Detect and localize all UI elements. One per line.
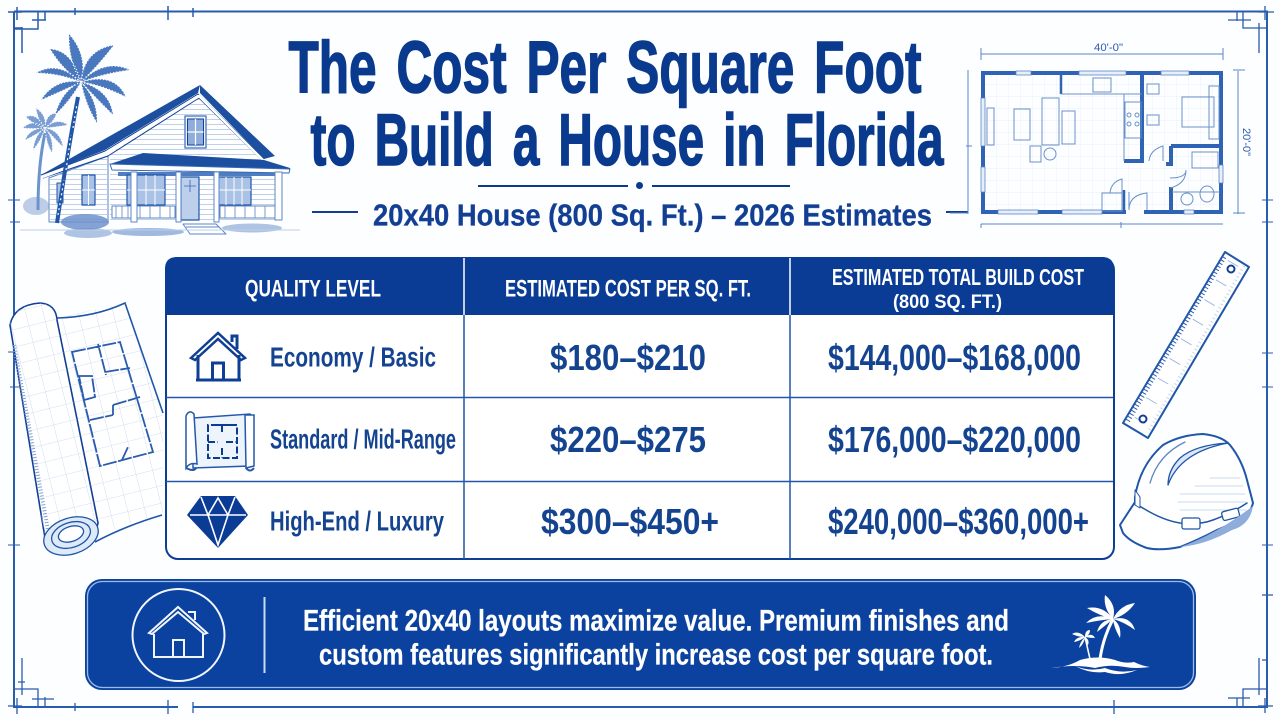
subtitle: 20x40 House (800 Sq. Ft.) – 2026 Estimates (373, 198, 932, 232)
table body (166, 258, 1114, 559)
house roof (41, 85, 275, 178)
row: luxury (187, 496, 1089, 548)
roll floor plan (72, 342, 153, 466)
icon: house in circle (132, 589, 224, 681)
callout text: Efficient 20x40 layouts maximize value. Premium finishes and (303, 604, 1009, 638)
roll cylinder (10, 303, 98, 554)
illustration: hard hat (1120, 434, 1253, 549)
row: luxury: $240,000–$360,000+ (828, 501, 1089, 542)
table (165, 257, 1114, 559)
table header: ESTIMATED COST PER SQ. FT. (505, 276, 751, 302)
table header: (800 SQ. FT.) (893, 292, 1002, 313)
row: economy: $180–$210 (550, 337, 706, 378)
house side wall (49, 156, 108, 222)
table header: QUALITY LEVEL (245, 276, 381, 302)
illustration: small palm tree (23, 108, 68, 210)
plan dimensions: 20'-0" (1240, 128, 1252, 156)
plan walls (983, 73, 1221, 212)
callout banner (85, 579, 1196, 690)
row: standard (186, 412, 1081, 470)
plan furniture (987, 78, 1220, 211)
icon: palm island (1051, 595, 1150, 674)
row: economy: Economy / Basic (270, 342, 436, 372)
row: standard: $176,000–$220,000 (828, 419, 1081, 460)
plan windows (981, 71, 1223, 215)
icon: blueprint scroll (186, 412, 254, 470)
illustration: floor plan (950, 42, 1252, 228)
icon: house (191, 333, 245, 380)
row: luxury: $300–$450+ (541, 501, 719, 542)
illustration: large palm tree (36, 34, 130, 223)
title: to Build a House in Florida (310, 100, 944, 181)
house gable (110, 98, 262, 160)
title: The Cost Per Square Foot (288, 28, 922, 108)
house shrubs (20, 197, 300, 238)
row: standard: Standard / Mid-Range (270, 424, 456, 454)
illustration: ruler (1123, 252, 1249, 438)
icon: diamond (187, 496, 248, 548)
row: standard: $220–$275 (550, 419, 706, 460)
roll end spiral (39, 510, 103, 562)
illustration: house (20, 85, 300, 238)
house porch (110, 153, 290, 234)
row: luxury: High-End / Luxury (270, 506, 444, 536)
plan dimensions: 40'-0" (1094, 42, 1123, 54)
callout text (303, 604, 1009, 672)
table header: ESTIMATED TOTAL BUILD COST (832, 264, 1084, 290)
table header (165, 257, 1114, 315)
title (288, 28, 944, 181)
callout text: custom features significantly increase cost per square foot. (319, 638, 993, 672)
title divider (478, 182, 790, 189)
row: economy (191, 333, 1081, 380)
illustration: rolled blueprint (10, 303, 163, 562)
plan dimensions (950, 42, 1252, 228)
row: economy: $144,000–$168,000 (828, 337, 1081, 378)
